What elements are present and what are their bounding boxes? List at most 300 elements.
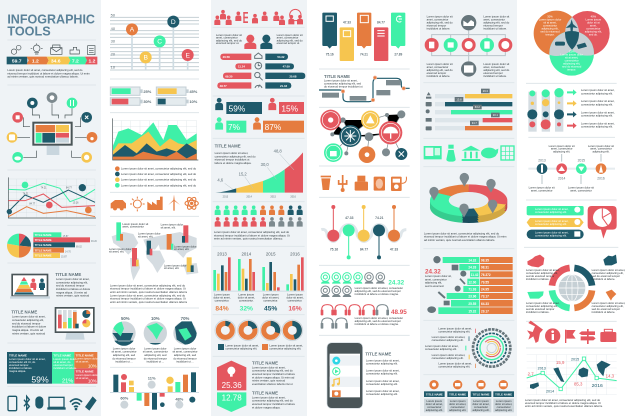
map line chart: 85,3 [574,382,583,387]
globes: Lorem ipsum dolor [174,347,196,350]
Venn diagram: amet, [590,24,597,28]
region: top middle [213,9,410,202]
horizontal comparison bars: 54.32 [277,55,285,59]
text block: eiusmod tempor incididunt ut labore [252,402,296,406]
org tree diagram: eiusmod tempor [483,24,503,28]
four title cards: TITLE NAME [473,392,490,396]
webcam pictogram: Lorem ipsum dolor sit amet, consectetur [355,287,403,290]
wave timeline [321,205,406,259]
headphones pictogram: Lorem ipsum dolor sit amet, consectetur [355,317,403,320]
region: top right [423,11,617,224]
stripes chart: 40 [111,26,116,31]
value ribbon [7,57,97,64]
text block: TITLE NAME [55,272,81,277]
stat tiles: Lorem ipsum dolor [76,358,98,361]
donut legend: Lorem ipsum dolor sit amet, [225,344,259,347]
horizontal timeline: Lorem ipsum dolor sit [549,145,575,148]
people pictogram rows [215,206,303,227]
stacked horizontal bars: 14.32 [468,259,476,263]
stacked horizontal bars: 24.95 [481,288,489,292]
text block: consectetur adipiscing elit, [12,318,44,322]
pie chart [7,234,31,258]
area chart legend: Lorem ipsum dolor sit amet, consectetur adipiscing elit, sed do [121,172,197,176]
text block: consectetur adipiscing elit, sed do [252,369,293,373]
value badges: 25.36 [222,381,242,390]
diverging bar chart: 60% [120,396,129,401]
four title cards: Lorem ipsum [496,400,512,403]
battery gauges: 25% [143,89,152,94]
grouped bars by year: consectetur. [215,299,230,303]
Venn diagram: consectetur [543,24,557,28]
headphones pictogram: incididunt ut labore et dolore magna. [355,322,399,326]
value ribbon: 1.2 [89,58,96,64]
text block: consectetur adipiscing elit, sed do [215,154,256,158]
country maps with text: incididunt ut labore. [592,277,615,281]
stacked horizontal bars: 12.00 [468,280,476,284]
bars with titles [33,232,98,258]
range bars: 20.1 [493,113,498,117]
grouped bars by year: 16% [288,306,302,313]
stripes chart: 30 [111,38,116,43]
text block: eiusmod tempor incididunt ut labore et dolore magna aliqua. Ut [110,287,186,291]
bubble columns with arrows [527,88,615,132]
horizontal comparison bars: 26.58 [223,55,230,59]
ribbon labels [527,206,584,239]
horizontal timeline: amet, consectetur [570,188,592,192]
text block: eiusmod tempor incididunt ut labore et dolore magna aliqua. Ut enim [424,235,507,239]
battery gauges: 10% [189,99,198,104]
org tree diagram: adipiscing elit, sed do [427,68,453,72]
stacked horizontal bars: 15.32 [468,309,476,313]
wave timeline: 84.77 [360,248,368,252]
donut legend: consectetur adipiscing elit. [225,346,257,350]
country maps with text: incididunt ut labore. [526,310,550,314]
growth curve chart: 2015 [270,195,276,198]
area chart [113,118,198,160]
percent stat boxes: 59% [229,103,246,113]
four title cards: dolor sit amet, [449,402,466,406]
stacked horizontal bars [425,256,513,314]
country maps with text: sed do eiusmod tempor [526,274,555,278]
grouped bars by year: 45% [264,306,277,313]
text block: eiusmod tempor incididunt ut labore et dolore magna aliqua. Ut [525,401,601,405]
four title cards: adipiscing elit. [472,408,490,412]
text block [11,310,47,335]
wave timeline: 47.33 [390,248,398,252]
country maps with text: consectetur adipiscing elit, [592,271,624,275]
org tree diagram: eiusmod tempor [427,71,446,75]
grouped bars by year: 2015 [266,251,276,256]
stacked horizontal bars: 23.96 [468,295,476,299]
grouped bars by year: Lorem ipsum [287,294,303,297]
bubble columns with arrows: Lorem ipsum dolor sit amet, [581,100,615,103]
area chart legend: Lorem ipsum dolor sit amet, consectetur adipiscing elit, sed do [121,167,197,171]
four title cards: consectetur [427,405,441,409]
stripes chart: C [157,39,162,46]
org tree diagram: Lorem ipsum dolor sit [483,63,509,66]
radial chart text: consectetur adipiscing elit. [432,338,464,342]
Venn diagram: adipiscing elit, [541,27,559,31]
org tree diagram: incididunt ut labore. [483,74,507,78]
globes: do eiusmod tempor [144,356,167,360]
stat tiles: TITLE NAME [9,353,27,357]
globes: adipiscing elit, sed [144,353,167,357]
stat tiles: Lorem ipsum dolor [76,374,98,377]
org tree diagram: Lorem ipsum dolor sit [483,16,509,19]
diverging bar chart: 11% [148,376,156,381]
stripes chart: 10 [111,65,116,70]
region: top left [7,12,199,218]
world map with callouts: sit amet, elit. [161,225,176,229]
stripes chart: 20 [111,52,116,57]
text block: magna aliqua. Ut enim ad [12,328,43,332]
grouped bars by year: 2016 [290,251,300,256]
text block: eiusmod tempor incididunt ut labore et dolore magna aliqua. Ut [214,233,290,237]
diverging bar chart [110,372,199,410]
column bars with icons: 84.77 [377,20,385,24]
webcam pictogram [321,273,405,297]
world map with callouts: amet, consectetur [122,225,144,229]
text block: enim ad minim veniam, quis nostrud exercitation ullamco. [214,237,283,241]
horizontal timeline: amet, consectetur [551,147,573,151]
horizontal timeline: Lorem ipsum dolor sit [568,187,594,190]
text block: incididunt ut labore et dolore [12,325,47,329]
Venn diagram: sed do. [589,33,598,37]
stat tiles: 21% [62,378,73,384]
grouped bars by year: dolor sit amet, [286,296,304,300]
text block: ad minim veniam, quis nostrud exercitation ullamco laboris. [7,75,79,79]
country maps with text: sed do eiusmod tempor [526,307,555,311]
four title cards: adipiscing elit. [449,408,466,412]
org tree diagram: adipiscing elit, sed do [483,21,510,25]
value badges: 12.78 [222,394,242,403]
text block: incididunt ut labore et dolore [56,287,91,291]
org tree diagram: adipiscing elit, sed do [483,68,510,72]
text block: TITLE NAME [215,144,241,149]
four title cards: consectetur [474,405,488,409]
stripes chart [110,13,199,70]
horizontal comparison bars: 11.24 [238,65,245,69]
horizontal timeline: 2013 [538,159,546,163]
Venn diagram: 30% [547,16,553,19]
bubble columns with arrows: Lorem ipsum dolor sit amet, [581,122,615,125]
text block [55,272,91,298]
four title cards: Lorem ipsum [450,400,466,403]
horizontal comparison bars [217,53,305,89]
range bars: 34.7 [472,121,477,125]
column bars with icons: 27.89 [394,53,403,57]
map line chart: 2013 [538,367,546,371]
globes: Lorem ipsum dolor [144,347,167,350]
stacked horizontal bars: 11.42 [471,273,479,277]
four title cards: consectetur [497,405,511,409]
text block: Lorem ipsum dolor sit amet, [12,316,46,319]
horizontal comparison bars: 48.77 [220,84,227,88]
country maps with text: Lorem ipsum dolor sit amet, [526,302,560,305]
value badges [217,361,246,412]
text block: Lorem ipsum dolor sit amet, consectetur adipiscing elit, sed do [525,399,600,402]
range bars [426,89,512,130]
world map with callouts: sit amet, elit. [174,247,190,251]
stat tiles: sit at amet. [76,360,89,364]
grouped bars by year: 2013 [217,251,227,256]
area chart legend: Lorem ipsum dolor sit amet, consectetur adipiscing elit, sed do [121,183,197,187]
webcam pictogram: adipiscing elit, sed do eiusmod tempor [355,289,401,293]
bars with titles: TITLE NAME [35,248,52,252]
country maps with text: sed do eiusmod tempor [592,307,620,311]
icons: devices row [8,396,97,411]
pipeline diagram: Lorem ipsum dolor sit amet, [324,80,358,83]
map line chart: 15,9 [556,360,565,365]
radial chart text: Lorem ipsum dolor sit amet, [438,327,472,330]
percent stat boxes [215,98,304,133]
phone feature text: consectetur adipiscing elit. [366,382,398,386]
area chart legend [115,166,197,188]
horizontal timeline: 2014 [558,176,566,180]
grouped bars by year: Lorem ipsum [214,294,230,297]
ribbon labels: consectetur adipiscing elit. [535,222,567,226]
bubble columns with arrows: consectetur adipiscing elit. [581,102,613,106]
horizontal timeline: adipiscing elit. [592,149,610,153]
Venn diagram: consectetur [586,27,600,31]
world map with callouts [109,222,198,281]
webcam pictogram: incididunt ut labore et dolore magna. [355,292,399,296]
text block: minim veniam, quis nostrud [252,379,286,383]
phone feature text: consectetur adipiscing elit. [366,372,398,376]
world map with callouts: Lorem ipsum dolor [174,245,197,248]
phone feature text: Lorem ipsum dolor sit amet, [366,390,400,393]
title [7,12,96,39]
line chart: 84.77 [29,204,36,206]
stat tiles: magna aliqua. [9,369,26,373]
bars with titles: 14.70 [65,251,72,253]
four title cards: adipiscing elit. [426,408,443,412]
stat tiles: 10% [88,379,97,384]
radial chart text: Lorem ipsum dolor sit amet, [425,345,459,348]
globes: incididunt ut ... [176,360,194,364]
icons: energy row [111,195,198,211]
webcam pictogram: 24.32 [388,279,405,286]
Venn diagram: 40% [591,16,596,19]
radial chart text: Lorem ipsum dolor sit amet, [438,362,472,365]
world map with callouts: sit amet, elit. [164,266,180,270]
percent stat boxes: 15% [281,103,299,113]
stat tiles: TITLE NAME [76,353,94,357]
text block: Lorem ipsum dolor sit amet, consectetur adipiscing elit, sed do [424,232,499,235]
Venn diagram: sit at amet, [565,56,579,60]
world map with callouts: Lorem ipsum dolor [138,233,161,236]
grouped bars by year [213,251,305,313]
text block: et dolore magna aliqua. Ut enim ad [252,375,295,379]
phone feature text: Lorem ipsum dolor sit amet, [366,380,400,383]
stacked horizontal bars: adipiscing elit, [425,281,442,285]
region: bottom left [7,216,199,411]
grouped bars by year: dolor sit amet, [262,296,279,300]
four title cards: Lorem ipsum [426,400,442,403]
donut charts [215,320,303,341]
line chart: 74.21 [41,187,47,189]
stacked horizontal bars: 25.55 [468,302,476,306]
text block: ad minim veniam, quis nostrud exercitation ullamco laboris. [424,238,495,242]
pipeline diagram: consectetur adipiscing elit, sed [324,82,362,86]
world map with callouts: sit amet, elit. [138,234,154,238]
grouped bars by year: dolor sit amet, [213,296,231,300]
line chart [7,177,96,218]
globes: sit amet, consectetur [172,350,198,354]
horizontal timeline: 2015 [578,159,585,163]
phone feature text: Lorem ipsum dolor sit amet, [366,370,400,373]
region: bottom middle [213,205,410,412]
range bars: 63.2 [475,105,480,109]
bubble columns with arrows: consectetur adipiscing elit. [581,114,613,118]
text block [252,360,296,386]
four title cards: TITLE NAME [449,392,466,396]
Venn diagram: Lorem ipsum dolor [539,18,561,22]
growth curve chart: 4,6 [217,178,224,183]
text block: TITLE NAME [11,310,37,315]
four title cards: consectetur [451,405,465,409]
text block: minim veniam, quis nostrud [56,294,90,298]
globes: sit amet, consectetur [111,350,137,354]
line chart: 74.21 [23,193,29,195]
map line chart: 2016 [592,383,603,389]
phone feature text [365,352,400,396]
horizontal timeline: Lorem ipsum dolor sit [529,187,555,190]
line chart: 15.16 [73,202,79,204]
text block: Lorem ipsum dolor sit amet, consectetur adipiscing elit, sed do [110,293,186,297]
horizontal timeline: Lorem ipsum dolor sit [588,145,614,148]
bars with titles: TITLE NAME [35,243,52,247]
horizontal timeline: 2016 [597,176,605,180]
text block [215,144,256,165]
battery gauges [110,87,198,105]
text block: exercitation ullamco laboris nisi ut [252,382,293,386]
Venn diagram: adipiscing elit, [585,30,602,34]
stat tiles: eiusmod tempor [9,363,29,367]
wave timeline: 74.21 [375,216,384,220]
four title cards: TITLE NAME [495,392,512,396]
value ribbon: 1.2 [32,58,39,64]
text block: eiusmod tempor incididunt ut labore et dolore magna aliqua. Ut [110,297,186,301]
org tree diagram [425,15,512,78]
stacked horizontal bars: Lorem ipsum dolor sit, [425,275,452,278]
text block: consectetur adipiscing elit, sed do [252,399,293,403]
grouped bars by year: Lorem ipsum [238,294,254,297]
stripes chart: E [185,52,190,59]
four title cards: Lorem ipsum [473,400,489,403]
stat tiles: 59% [31,374,49,384]
radial chart text [425,326,476,368]
icons: people row [214,9,303,25]
area chart legend: Lorem ipsum dolor sit amet, consectetur adipiscing elit, sed do [121,178,197,182]
Venn diagram: consectetur [565,59,579,63]
horizontal comparison bars: 69.30 [225,74,233,78]
stacked horizontal bars: 98.35 [481,259,489,263]
text block [252,390,296,409]
Venn diagram: adipiscing elit, [563,62,580,66]
org tree diagram: Lorem ipsum dolor sit [427,63,453,66]
monitor with charts [55,307,95,340]
phone feature text: consectetur adipiscing elit. [366,392,398,396]
grouped bars by year: 84% [215,306,229,313]
smartphone [327,343,363,408]
stacked horizontal bars: 64.33 [481,302,489,306]
growth curve chart: 48,8 [274,149,282,154]
org tree diagram: eiusmod tempor [427,24,446,28]
bubble columns with arrows: consectetur adipiscing elit. [581,91,613,95]
horizontal timeline: amet, consectetur [531,188,553,192]
country maps with text [526,255,625,314]
text block: magna aliqua. Ut enim ad [56,290,87,294]
headphones pictogram: adipiscing elit, sed do eiusmod tempor [355,319,401,323]
stat tiles: TITLE NAME [53,353,71,357]
text block: eiusmod tempor incididunt ut labore [252,372,296,376]
country maps with text: incididunt ut labore. [526,277,550,281]
org tree diagram: incididunt ut labore. [483,27,507,31]
grouped bars by year: 32% [240,306,253,313]
radial chart text: consectetur adipiscing elit. [432,356,464,360]
map line chart [527,355,617,395]
stacked horizontal bars: 73.17 [481,295,489,299]
radial chart text: consectetur adipiscing elit. [438,364,470,368]
value ribbon: 34.6 [51,58,61,64]
stacked horizontal bars: amet, consectetur [425,277,447,281]
org tree diagram: eiusmod tempor [483,71,503,75]
text block: Lorem ipsum dolor sit amet, consectetur adipiscing elit, sed do [214,231,289,234]
headphones pictogram: 48.95 [391,309,407,316]
globes: adipiscing elit, sed [174,353,197,357]
growth curve chart: 2014 [246,195,252,198]
radial ring chart [473,329,510,367]
percent stat boxes: 7% [228,122,241,132]
region: bottom right [423,206,625,412]
text blocks and portraits: eiusmod tempor ut. [277,41,300,45]
growth curve chart: 30,0 [261,162,269,167]
stripes chart: B [143,55,148,62]
value ribbon: 7.2 [72,58,79,64]
country maps with text: Lorem ipsum dolor sit amet, [592,302,625,305]
org tree diagram: amet, consectetur [483,65,505,69]
pipeline diagram [319,74,410,102]
growth curve chart: 15,2 [239,172,247,177]
globes: sit amet, consectetur [143,350,168,354]
ribbon labels: consectetur adipiscing elit. [535,234,567,238]
radial chart text: consectetur adipiscing elit. [438,329,470,333]
3D ring chart with pins [429,173,509,224]
battery gauges: 45% [189,89,198,94]
ribbon labels: Lorem ipsum dolor sit amet, [535,232,569,235]
Venn diagram: sed do eiusmod [540,30,560,34]
world map with callouts: Lorem ipsum dolor [164,264,187,267]
donut legend: Lorem ipsum dolor sit amet, [269,344,303,347]
text block: consectetur adipiscing elit, [56,280,88,284]
horizontal timeline: amet, consectetur [590,147,612,151]
ribbon labels: consectetur adipiscing elit. [535,210,567,214]
text block: Lorem ipsum dolor sit amet, consectetur adipiscing elit, sed do [7,69,82,72]
network around monitor [7,92,97,163]
stat tiles: TITLE NAME [76,370,94,374]
column bars with icons: 75.16 [326,53,334,57]
Venn diagram: 15% [569,51,574,54]
stacked horizontal bars: 24.33 [468,266,476,270]
column bars with icons: 74.21 [360,53,368,57]
Venn diagram: sed do eiusmod [562,65,582,69]
bubble columns with arrows: Lorem ipsum dolor sit amet, [581,111,615,114]
text blocks and portraits: Lorem ipsum dolor sit [216,34,242,37]
phone feature text: TITLE NAME [365,352,391,357]
stat tiles: sit at amet. [76,376,89,380]
text block: labore et dolore magna aliqua. [215,161,252,165]
